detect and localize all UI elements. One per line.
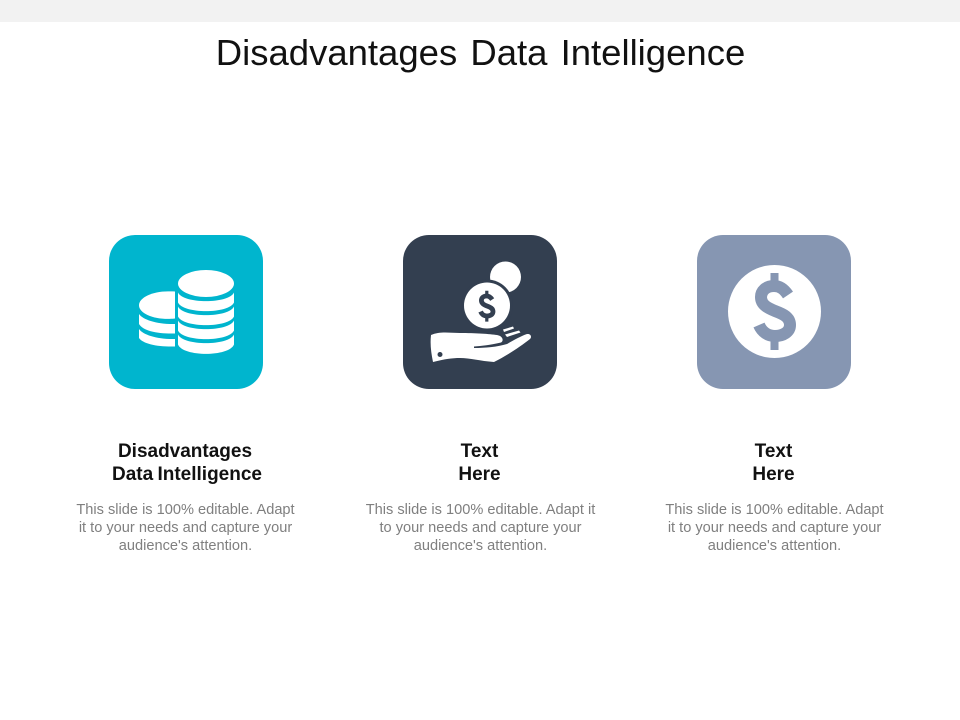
icon: large dollar sign [759,273,790,350]
column 3 heading: Text [755,441,792,462]
icon: dollar coin [464,282,510,328]
column 3 text: This slide is 100% editable. Adapt [665,502,884,518]
column 1 text [76,502,295,554]
column 3 heading [752,441,795,485]
column 2 heading [458,441,501,485]
icon: coin gap ring [461,280,513,332]
column 2 text [366,502,596,554]
column 2 text: to your needs and capture your [379,520,582,536]
column 1 heading: Data Intelligence [112,464,262,485]
title: Disadvantages Data Intelligence [216,32,745,73]
icon tile: coin stacks [109,235,263,389]
column 3 heading: Here [752,464,795,485]
column 1 text: audience's attention. [119,538,252,554]
column 3 text [665,502,884,554]
icon: open hand [431,326,531,362]
column 1 heading: Disadvantages [118,441,252,462]
column 1 heading [112,441,262,485]
icon: small dollar sign [481,291,493,322]
top band [0,0,960,22]
icon tile: hand holding coins [403,235,557,389]
column 3 text: audience's attention. [708,538,841,554]
icon: back coin [490,262,521,292]
column 1 text: This slide is 100% editable. Adapt [76,502,295,518]
icon tile: dollar circle [697,235,851,389]
icon: cuff button [438,352,442,357]
icon: left coin stack [139,291,175,347]
column 2 text: audience's attention. [414,538,547,554]
column 2 text: This slide is 100% editable. Adapt it [366,502,595,518]
column 2 heading: Text [461,441,498,462]
column 3 text: it to your needs and capture your [668,520,881,536]
column 2 heading: Here [458,464,501,485]
column 1 text: it to your needs and capture your [79,520,292,536]
icon: white circle [728,265,821,358]
icon: right coin stack [178,270,234,354]
